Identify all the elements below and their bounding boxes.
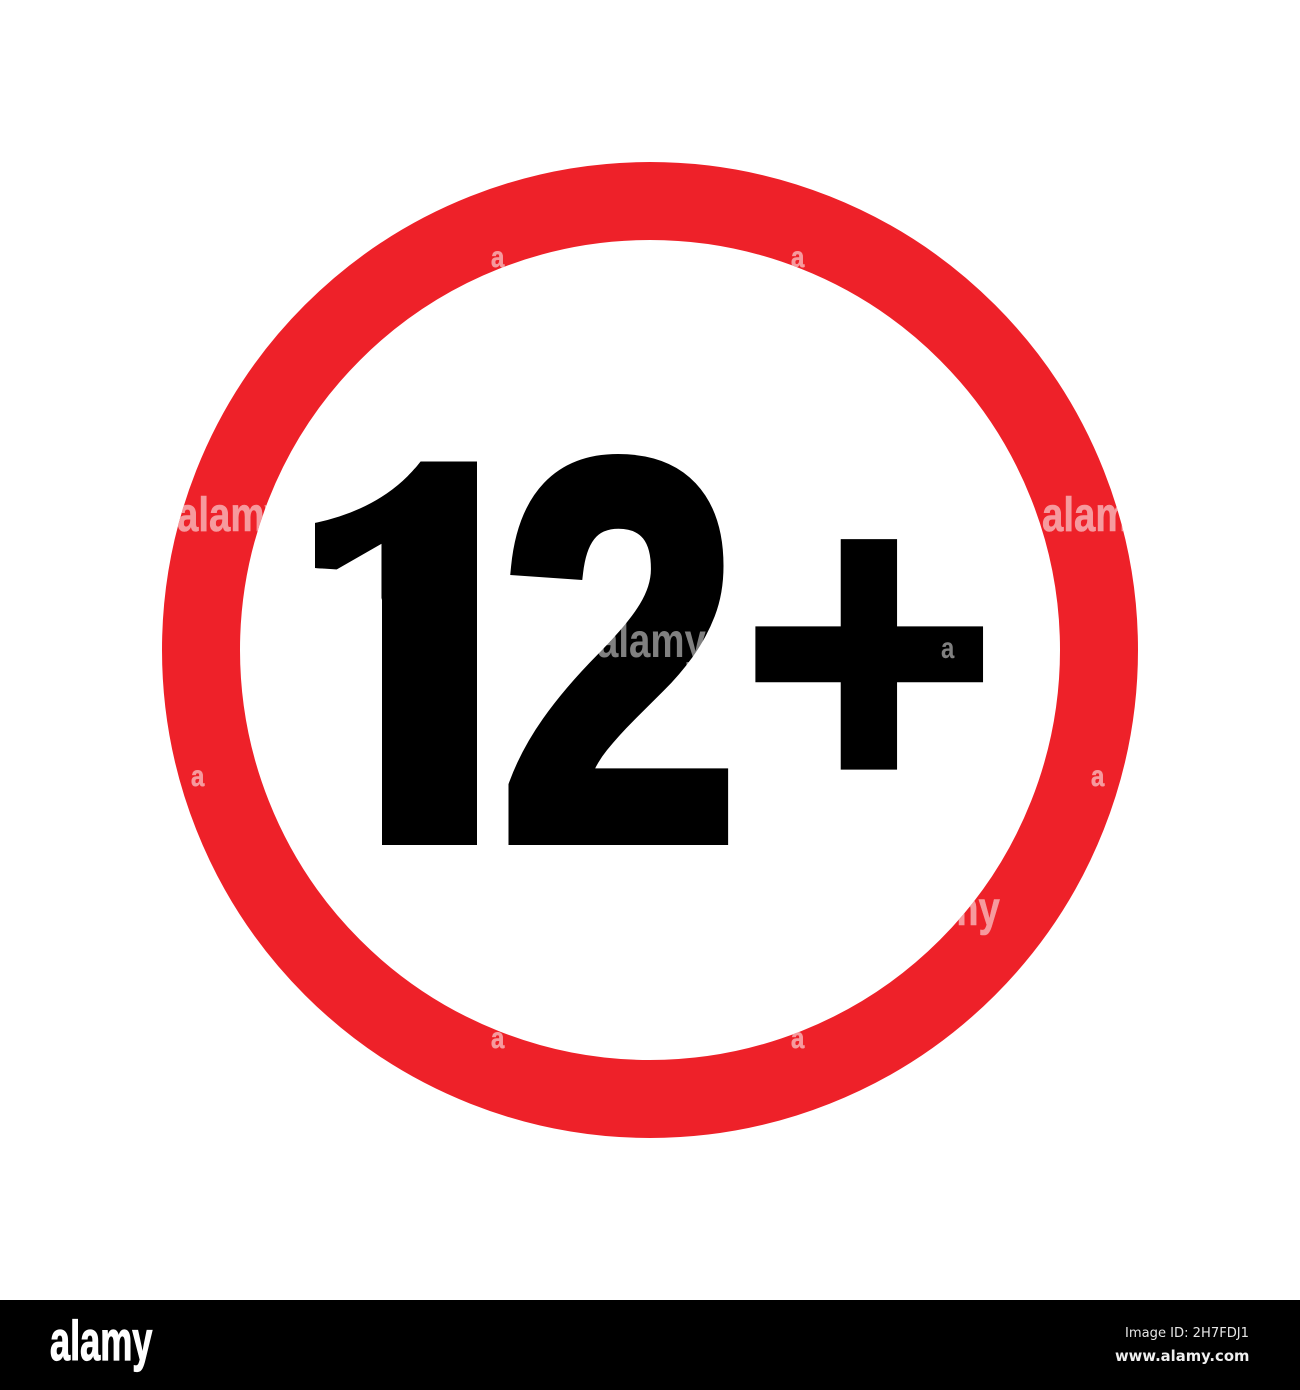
ring watermarks (177, 239, 1151, 1055)
age rating: 12+ (315, 454, 984, 845)
footer bar (0, 1300, 1300, 1390)
plus watermark: a (941, 630, 955, 665)
digit 1: 1 (252, 353, 578, 953)
ring watermarks: alamy (1042, 489, 1151, 542)
ring watermarks: a (791, 239, 805, 274)
ring watermarks: a (491, 1020, 505, 1055)
ring watermarks: a (491, 239, 505, 274)
icon: red prohibition ring (177, 201, 1151, 1099)
ring watermarks: a (1091, 758, 1105, 793)
image id: Image ID: 2H7FDJ1 (1125, 1326, 1249, 1341)
digit 2: 2 (500, 352, 739, 952)
ring watermarks: a (191, 758, 205, 793)
ring watermarks: amy (923, 883, 1000, 936)
plus sign: + (741, 403, 997, 893)
footer logo: alamy (50, 1309, 152, 1372)
website: www.alamy.com (1115, 1348, 1249, 1365)
ring watermarks: alamy (177, 489, 286, 542)
ring watermarks: a (791, 1020, 805, 1055)
center watermark: alamy (597, 615, 706, 668)
